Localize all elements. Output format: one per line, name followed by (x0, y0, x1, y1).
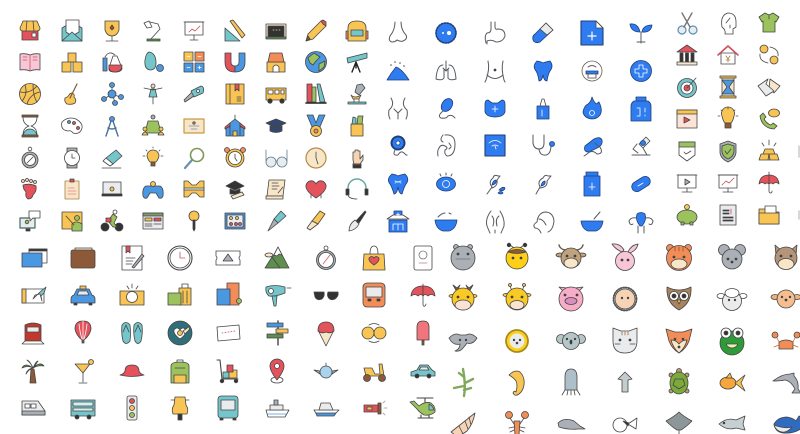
icon: plane ticket (22, 287, 46, 303)
icon: liquid drop and bubble (145, 52, 164, 72)
icon: luggage cart (217, 360, 238, 383)
icon: goldfish (720, 373, 745, 391)
icon: whale (774, 416, 800, 433)
icon: bus (218, 396, 238, 420)
icon: filled tooth (388, 174, 408, 194)
icon: microscope (348, 84, 366, 104)
icon: temple building (267, 53, 285, 72)
icon: pig (559, 287, 583, 311)
icon: drawing compass (106, 116, 118, 136)
icon: shop (20, 21, 40, 40)
icon: abdomen (486, 211, 504, 233)
icon: helicopter (410, 398, 435, 418)
icon: teacher at board (62, 212, 82, 231)
icon: shield badge (679, 142, 695, 161)
icon: camera (120, 284, 144, 305)
icon: bird on branch (487, 175, 505, 194)
icon: hot air balloon (75, 321, 91, 343)
panel: animal icons (449, 243, 800, 434)
icon: paintbrush (349, 211, 366, 231)
icon: open book (20, 54, 40, 71)
icon: wallet (71, 248, 95, 268)
icon: gold bars (759, 140, 779, 160)
icon: ballet dancer (144, 84, 162, 104)
icon: framed certificate (184, 119, 204, 133)
icon: frog (720, 328, 744, 355)
icon: backpack (346, 21, 368, 41)
icon: signpost (267, 321, 288, 345)
icon: scissors (678, 13, 697, 34)
icon: hourglass (22, 115, 38, 137)
icon: cyclist (101, 210, 123, 231)
icon: guitar (65, 84, 77, 104)
icon: abacus (225, 213, 245, 229)
icon: giraffe (503, 284, 531, 310)
icon: palm tree (22, 360, 44, 383)
icon: graduation cap and diploma (226, 181, 244, 199)
icon: alphabet blocks (62, 53, 82, 72)
icon: elephant (449, 334, 477, 351)
icon: double decker bus (71, 400, 95, 419)
icon: stomach (485, 22, 505, 44)
icon: blackboard (266, 24, 286, 39)
icon: utility knife (184, 86, 204, 102)
icon: tiger (666, 244, 692, 270)
icon: medical document (581, 21, 603, 45)
icon: stock chart screen (718, 175, 738, 192)
icon: notebook (226, 84, 244, 104)
icon: beach umbrella (411, 284, 435, 306)
icon: basketball (20, 84, 40, 104)
icon: virus with tail (392, 136, 407, 155)
icon: light bulb (143, 147, 163, 166)
icon: compact car (411, 365, 435, 378)
icon: rice bowl (435, 213, 457, 231)
icon: glasses (266, 150, 287, 167)
edge fragment: cropped icon at right edge (798, 146, 800, 219)
icon: love stamp (168, 321, 192, 345)
icon: books on a shelf (306, 84, 326, 103)
icon: house with yen (718, 46, 738, 64)
icon: pufferfish (613, 418, 637, 432)
icon: piggy bank (677, 204, 697, 225)
icon: sea shell (451, 413, 475, 434)
icon: compass (316, 246, 336, 270)
icon: lion (506, 330, 528, 352)
icon: passport (414, 246, 432, 270)
icon: mouth mask face (582, 61, 602, 81)
icon: game controller (143, 182, 163, 198)
icon: student group (142, 115, 164, 135)
icon: lungs (436, 61, 456, 80)
icon: heart (306, 181, 326, 198)
icon: medal (307, 115, 325, 136)
icon: ticket (216, 251, 240, 265)
icon: ice cream cone (318, 322, 334, 346)
icon: marker (307, 211, 325, 230)
icon: ticket with ruler (184, 181, 204, 197)
icon: seahorse (509, 371, 524, 395)
icon: squid (618, 372, 632, 392)
icon: fountain pen (268, 211, 286, 231)
icon: footprint (22, 178, 36, 199)
icon: telescope (347, 53, 367, 72)
icon: target (678, 78, 696, 98)
icon: postcard (217, 325, 240, 341)
icon: video calendar (677, 110, 697, 128)
icon: supplement jar (631, 97, 651, 121)
icon: octopus (562, 369, 580, 395)
icon: laptop (102, 182, 122, 196)
icon: bus front (363, 283, 385, 307)
icon: flashlight (364, 401, 387, 415)
icon: hourglass (720, 76, 736, 98)
icon: rabbit (612, 244, 638, 270)
icon: hips (389, 98, 407, 119)
icon: hair dryer (266, 286, 291, 306)
icon: hospital (387, 211, 409, 232)
icon: manatee (558, 419, 585, 429)
icon: flame (583, 97, 601, 119)
icon: shopping bag (363, 246, 385, 270)
icon: paint palette (62, 118, 82, 133)
icon: bullet train (22, 401, 45, 415)
icon: blood pressure scale (485, 135, 505, 156)
icon: medical cross circle (630, 60, 652, 82)
icon: magnet (225, 53, 245, 72)
icon: molecule (102, 82, 124, 106)
icon: ruler and set square (225, 20, 245, 41)
icon: polo shirt (759, 13, 779, 32)
icon: cocktail (75, 360, 94, 383)
icon: owl (667, 287, 691, 310)
icon: sheep (717, 288, 747, 310)
icon: donkey (775, 245, 797, 270)
icon: waist (485, 61, 505, 82)
icon: clipboard (65, 179, 79, 199)
icon: pencil cup (351, 116, 363, 136)
icon: deer (449, 285, 477, 310)
icon: popsicle (417, 321, 429, 345)
icon: lobster (506, 412, 528, 434)
icon: school building (225, 115, 245, 136)
icon: globe (306, 52, 326, 72)
panel: medical icons (387, 21, 653, 233)
icon: ox (556, 245, 586, 268)
icon: medicine jar (584, 172, 600, 196)
icon: folder (759, 206, 779, 224)
icon: wall clock (306, 148, 326, 168)
icon: idea bulb (718, 107, 738, 128)
icon: presentation board (184, 22, 204, 40)
icon: bird outline (536, 175, 551, 194)
icon: virus cell (436, 23, 456, 43)
icon: hiking backpack (171, 360, 189, 383)
icon: currency exchange (760, 45, 778, 64)
icon: yacht (314, 403, 339, 416)
icon: dolphin (773, 373, 800, 393)
icon: tooth (534, 61, 552, 81)
icon: umbrella (759, 172, 779, 193)
icon: fox (666, 329, 692, 353)
icon: sun hat (120, 365, 144, 376)
icon: alarm clock (224, 148, 246, 167)
icon: nose (389, 22, 407, 42)
icon: coin exchange (362, 324, 386, 342)
icon: hippo (451, 244, 475, 270)
icon: koala (556, 332, 586, 350)
icon: city buildings (217, 283, 242, 305)
icon: line microscope (632, 137, 650, 155)
icon: stingray (666, 412, 692, 434)
icon: cat (613, 328, 637, 353)
icon: flip flops (122, 322, 142, 344)
icon: cruise ship (266, 400, 289, 417)
icon: turtle (669, 368, 689, 394)
icon: seaweed (454, 369, 473, 396)
icon: pencil (306, 20, 326, 41)
icon: bank (677, 45, 697, 65)
panel: education icons (20, 20, 368, 231)
icon: scooter (364, 364, 386, 382)
icon: wrist watch (64, 148, 80, 168)
icon: head profile (534, 212, 554, 233)
icon: envelope (62, 20, 82, 41)
icon: mouse (718, 244, 746, 269)
icon: train (22, 323, 44, 344)
icon: fish (719, 416, 745, 430)
icon: sunglasses (314, 292, 338, 300)
icon: scooter front (171, 397, 189, 420)
icon: pill (630, 174, 652, 194)
icon: analog clock (168, 246, 192, 270)
icon: traffic light (127, 396, 137, 420)
icon: taxi (71, 286, 95, 305)
icon: graduation cap (266, 119, 286, 132)
icon: airplane front (314, 363, 338, 378)
icon: signed document (122, 246, 144, 270)
panel: travel icons (22, 246, 435, 420)
icon: test tube (533, 23, 553, 43)
icon: video screen (677, 175, 697, 192)
icon: raised hand (353, 150, 363, 168)
icon: phone with speech bubble (760, 109, 780, 129)
icon: crab (772, 332, 800, 349)
icon: headset (346, 179, 368, 199)
icon: credit cards (22, 249, 47, 267)
icon: maths symbols (184, 52, 204, 72)
icon: green shield (720, 141, 736, 162)
icon: luggage (168, 284, 191, 305)
panel: finance icons (677, 13, 780, 225)
icon: eye (436, 173, 456, 191)
icon: bee (506, 243, 528, 269)
icon: map pin (270, 359, 284, 383)
icon: video chat monitor (20, 211, 40, 231)
icon: seedling (630, 24, 652, 43)
icon: trophy (105, 21, 119, 41)
icon: stopwatch (22, 147, 38, 168)
icon: hedgehog (614, 288, 636, 310)
icon: head with arrows (722, 13, 736, 34)
icon: paper scroll (266, 180, 285, 199)
icon: mortar and pestle (581, 212, 603, 231)
icon: mountains (265, 247, 289, 268)
icon: desk lamp (144, 21, 160, 41)
icon: uterus (629, 212, 653, 233)
icon: invoice (720, 205, 736, 225)
icon: eraser (102, 150, 122, 168)
icon: stethoscope (533, 135, 554, 155)
icon: skin mound (387, 62, 409, 80)
icon: puppy (771, 290, 800, 308)
icon: magnifying glass (185, 148, 204, 168)
icon: medicine bottle (537, 99, 549, 119)
icon: sperm cell (439, 96, 455, 118)
icon: lab flasks (103, 53, 122, 72)
icon: kidney (438, 135, 455, 156)
icon: school bus (266, 88, 286, 103)
icon: handshake (758, 79, 780, 96)
icon: capsule with cord (584, 138, 602, 156)
icon: brush tip (189, 211, 199, 231)
icon: web page layout (143, 213, 163, 229)
icon: cat medical box (485, 100, 505, 117)
